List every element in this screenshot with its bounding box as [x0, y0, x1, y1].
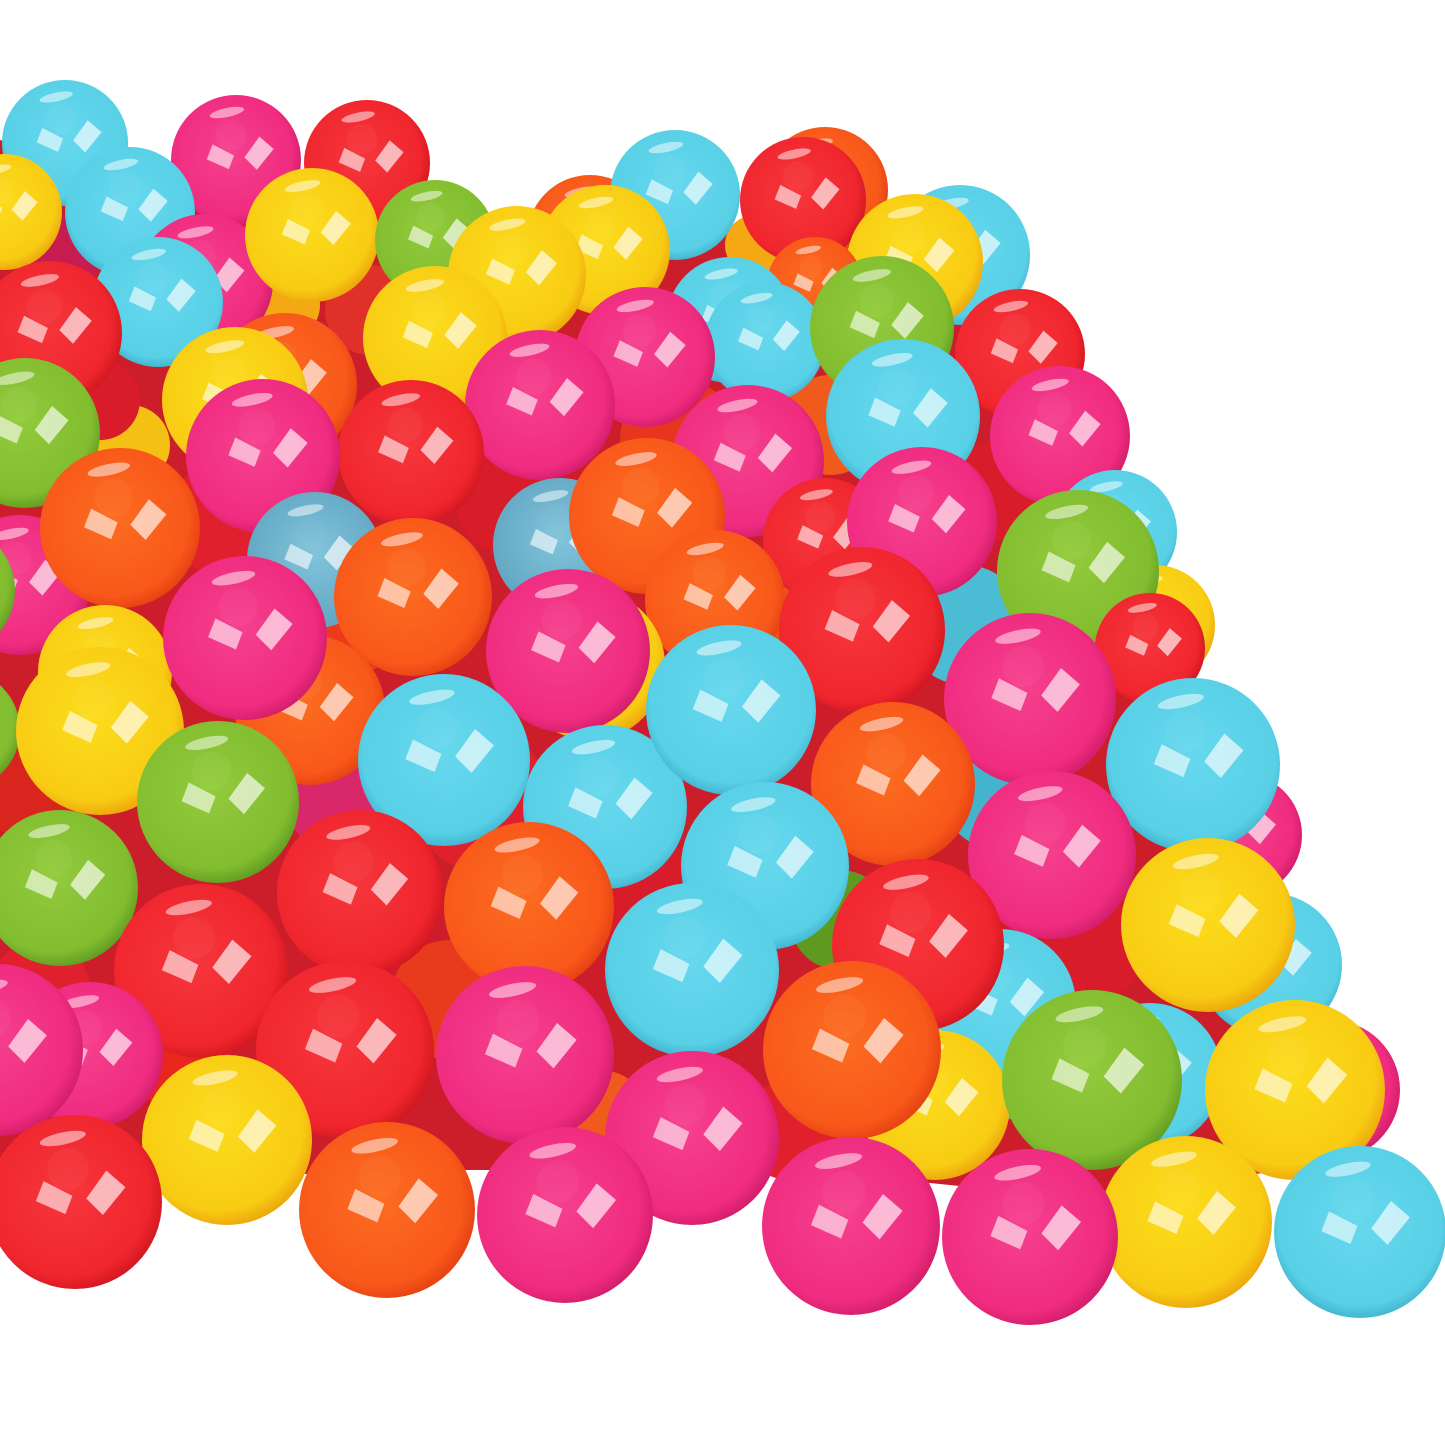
lower rows of balls — [0, 838, 1400, 1225]
hidden balls glimpsed through the gaps — [0, 215, 1145, 1180]
front row of balls — [0, 1115, 1445, 1325]
upper middle rows of balls — [0, 266, 1215, 703]
back rows of balls — [0, 80, 1085, 419]
shadowed gaps between the balls — [0, 140, 1340, 1200]
central rows of balls — [0, 518, 1302, 992]
